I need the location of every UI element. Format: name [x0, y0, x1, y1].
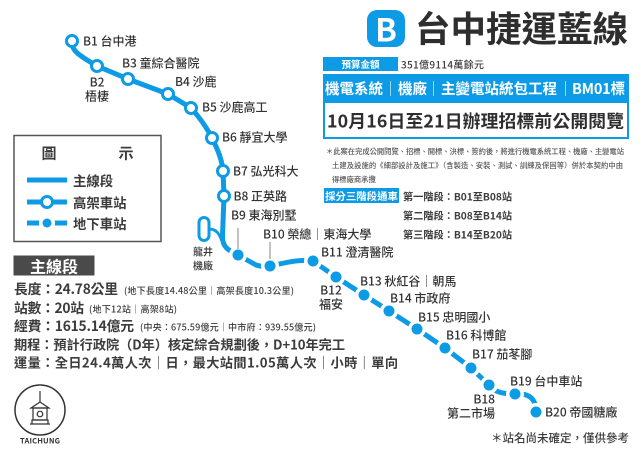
legend: main line: 主線段 — [73, 170, 114, 190]
depot branch — [199, 218, 222, 241]
station labels: B14 市政府 — [390, 290, 450, 306]
station labels: B1 台中港 — [83, 32, 137, 50]
main line heading: 主線段 — [30, 254, 78, 278]
legend: elevated station: 高架車站 — [73, 192, 127, 212]
underground line segment — [238, 255, 536, 412]
tender scope: 主變電站統包工程 — [441, 78, 557, 99]
legend heading: 圖 — [41, 142, 57, 164]
station labels: B17 茄苳腳 — [472, 346, 532, 362]
length: 長度：24.78公里 — [14, 278, 118, 298]
Taichung logo: TAICHUNG — [20, 436, 60, 446]
station labels: B5 沙鹿高工 — [202, 98, 268, 116]
main line facts — [14, 278, 398, 372]
tender scope — [325, 78, 625, 99]
tender note: ＊此案在完成公開閱覽、招標、開標、決標、簽約後，將進行機電系統工程、機廠、主變電站 — [326, 147, 625, 157]
tender note: 土建及設施的《細部設計及施工》（含製造、安裝、測試、訓練及保固等）併於本契約中由 — [332, 161, 623, 171]
station labels: 第二市場 — [447, 404, 495, 422]
phases label: 採分三階段通車 — [325, 188, 398, 203]
tender panel — [323, 74, 629, 138]
underground station gaps — [229, 246, 545, 421]
phases list — [403, 188, 512, 242]
tender note: 得標廠商承攬 — [332, 175, 376, 185]
station labels — [83, 32, 617, 422]
Taichung logo — [15, 385, 65, 446]
stations: (地下12站｜高架8站) — [89, 302, 177, 316]
station labels: B13 秋紅谷｜朝馬 — [360, 272, 456, 290]
station labels: 機廠 — [193, 258, 213, 272]
station labels: B3 童綜合醫院 — [122, 54, 200, 72]
budget label — [323, 57, 398, 71]
station labels: B4 沙鹿 — [175, 73, 217, 90]
elevated line segment — [72, 41, 238, 255]
stations — [14, 297, 177, 317]
tender scope: BM01標 — [572, 78, 625, 99]
station labels: B19 台中車站 — [510, 372, 582, 390]
title badge icon — [367, 6, 405, 52]
length — [14, 278, 294, 298]
phases list: 第二階段：B08至B14站 — [403, 208, 512, 222]
public review dates: 10月16日至21日辦理招標前公開閱覽 — [327, 108, 624, 134]
main line heading — [14, 254, 94, 278]
cost: (中央：675.59億元｜中市府：939.55億元) — [140, 320, 316, 334]
legend heading — [41, 142, 134, 164]
tender scope: 機電系統 — [325, 78, 383, 99]
phases list: 第三階段：B14至B20站 — [403, 226, 512, 242]
station labels: B15 忠明國小 — [418, 308, 490, 326]
stations: 站數：20站 — [14, 297, 84, 317]
station labels: 梧棲 — [85, 88, 109, 104]
station labels: B20 帝國糖廠 — [545, 404, 617, 420]
legend: main line — [27, 170, 114, 190]
length: (地下長度14.48公里｜高架長度10.3公里) — [124, 283, 294, 297]
station labels: B16 科博館 — [446, 326, 506, 344]
ridership: 運量：全日24.4萬人次｜日，最大站間1.05萬人次｜小時｜單向 — [14, 352, 398, 372]
station labels: B8 正英路 — [234, 188, 287, 204]
elevated stations B1 to B8 — [66, 36, 230, 202]
station leader lines — [238, 228, 270, 259]
station labels: B2 — [90, 74, 105, 90]
station labels: 福安 — [319, 296, 343, 312]
station labels: B12 — [320, 282, 342, 298]
station labels: 龍井 — [193, 244, 213, 258]
title badge icon: B — [375, 6, 397, 52]
budget amount: 351億9114萬餘元 — [401, 56, 484, 72]
phases list: 第一階段：B01至B08站 — [403, 188, 512, 204]
tender scope: 機廠 — [398, 78, 427, 99]
legend: elevated station — [27, 192, 127, 212]
tender note — [326, 147, 625, 185]
cost — [14, 315, 316, 335]
station labels: B6 靜宜大學 — [222, 128, 288, 146]
station name disclaimer: ＊站名尚未確定，僅供參考 — [491, 430, 629, 446]
underground stations B9 to B20 — [232, 250, 542, 418]
title: 台中捷運藍線 — [415, 2, 628, 52]
legend heading: 示 — [118, 142, 134, 164]
legend: underground station — [27, 213, 127, 233]
route map — [66, 36, 545, 421]
station labels: B10 榮總｜東海大學 — [263, 226, 371, 242]
schedule: 期程：預計行政院（D年）核定綜合規劃後，D+10年完工 — [14, 334, 345, 354]
cost: 經費：1615.14億元 — [14, 315, 134, 335]
station labels: B7 弘光科大 — [233, 162, 299, 180]
station labels: B18 — [473, 390, 495, 408]
station labels: B11 澄清醫院 — [321, 244, 393, 260]
legend: underground station: 地下車站 — [73, 213, 127, 233]
budget label: 預算金額 — [341, 57, 380, 71]
legend panel — [14, 136, 161, 242]
station labels: B9 東海別墅 — [231, 206, 297, 224]
